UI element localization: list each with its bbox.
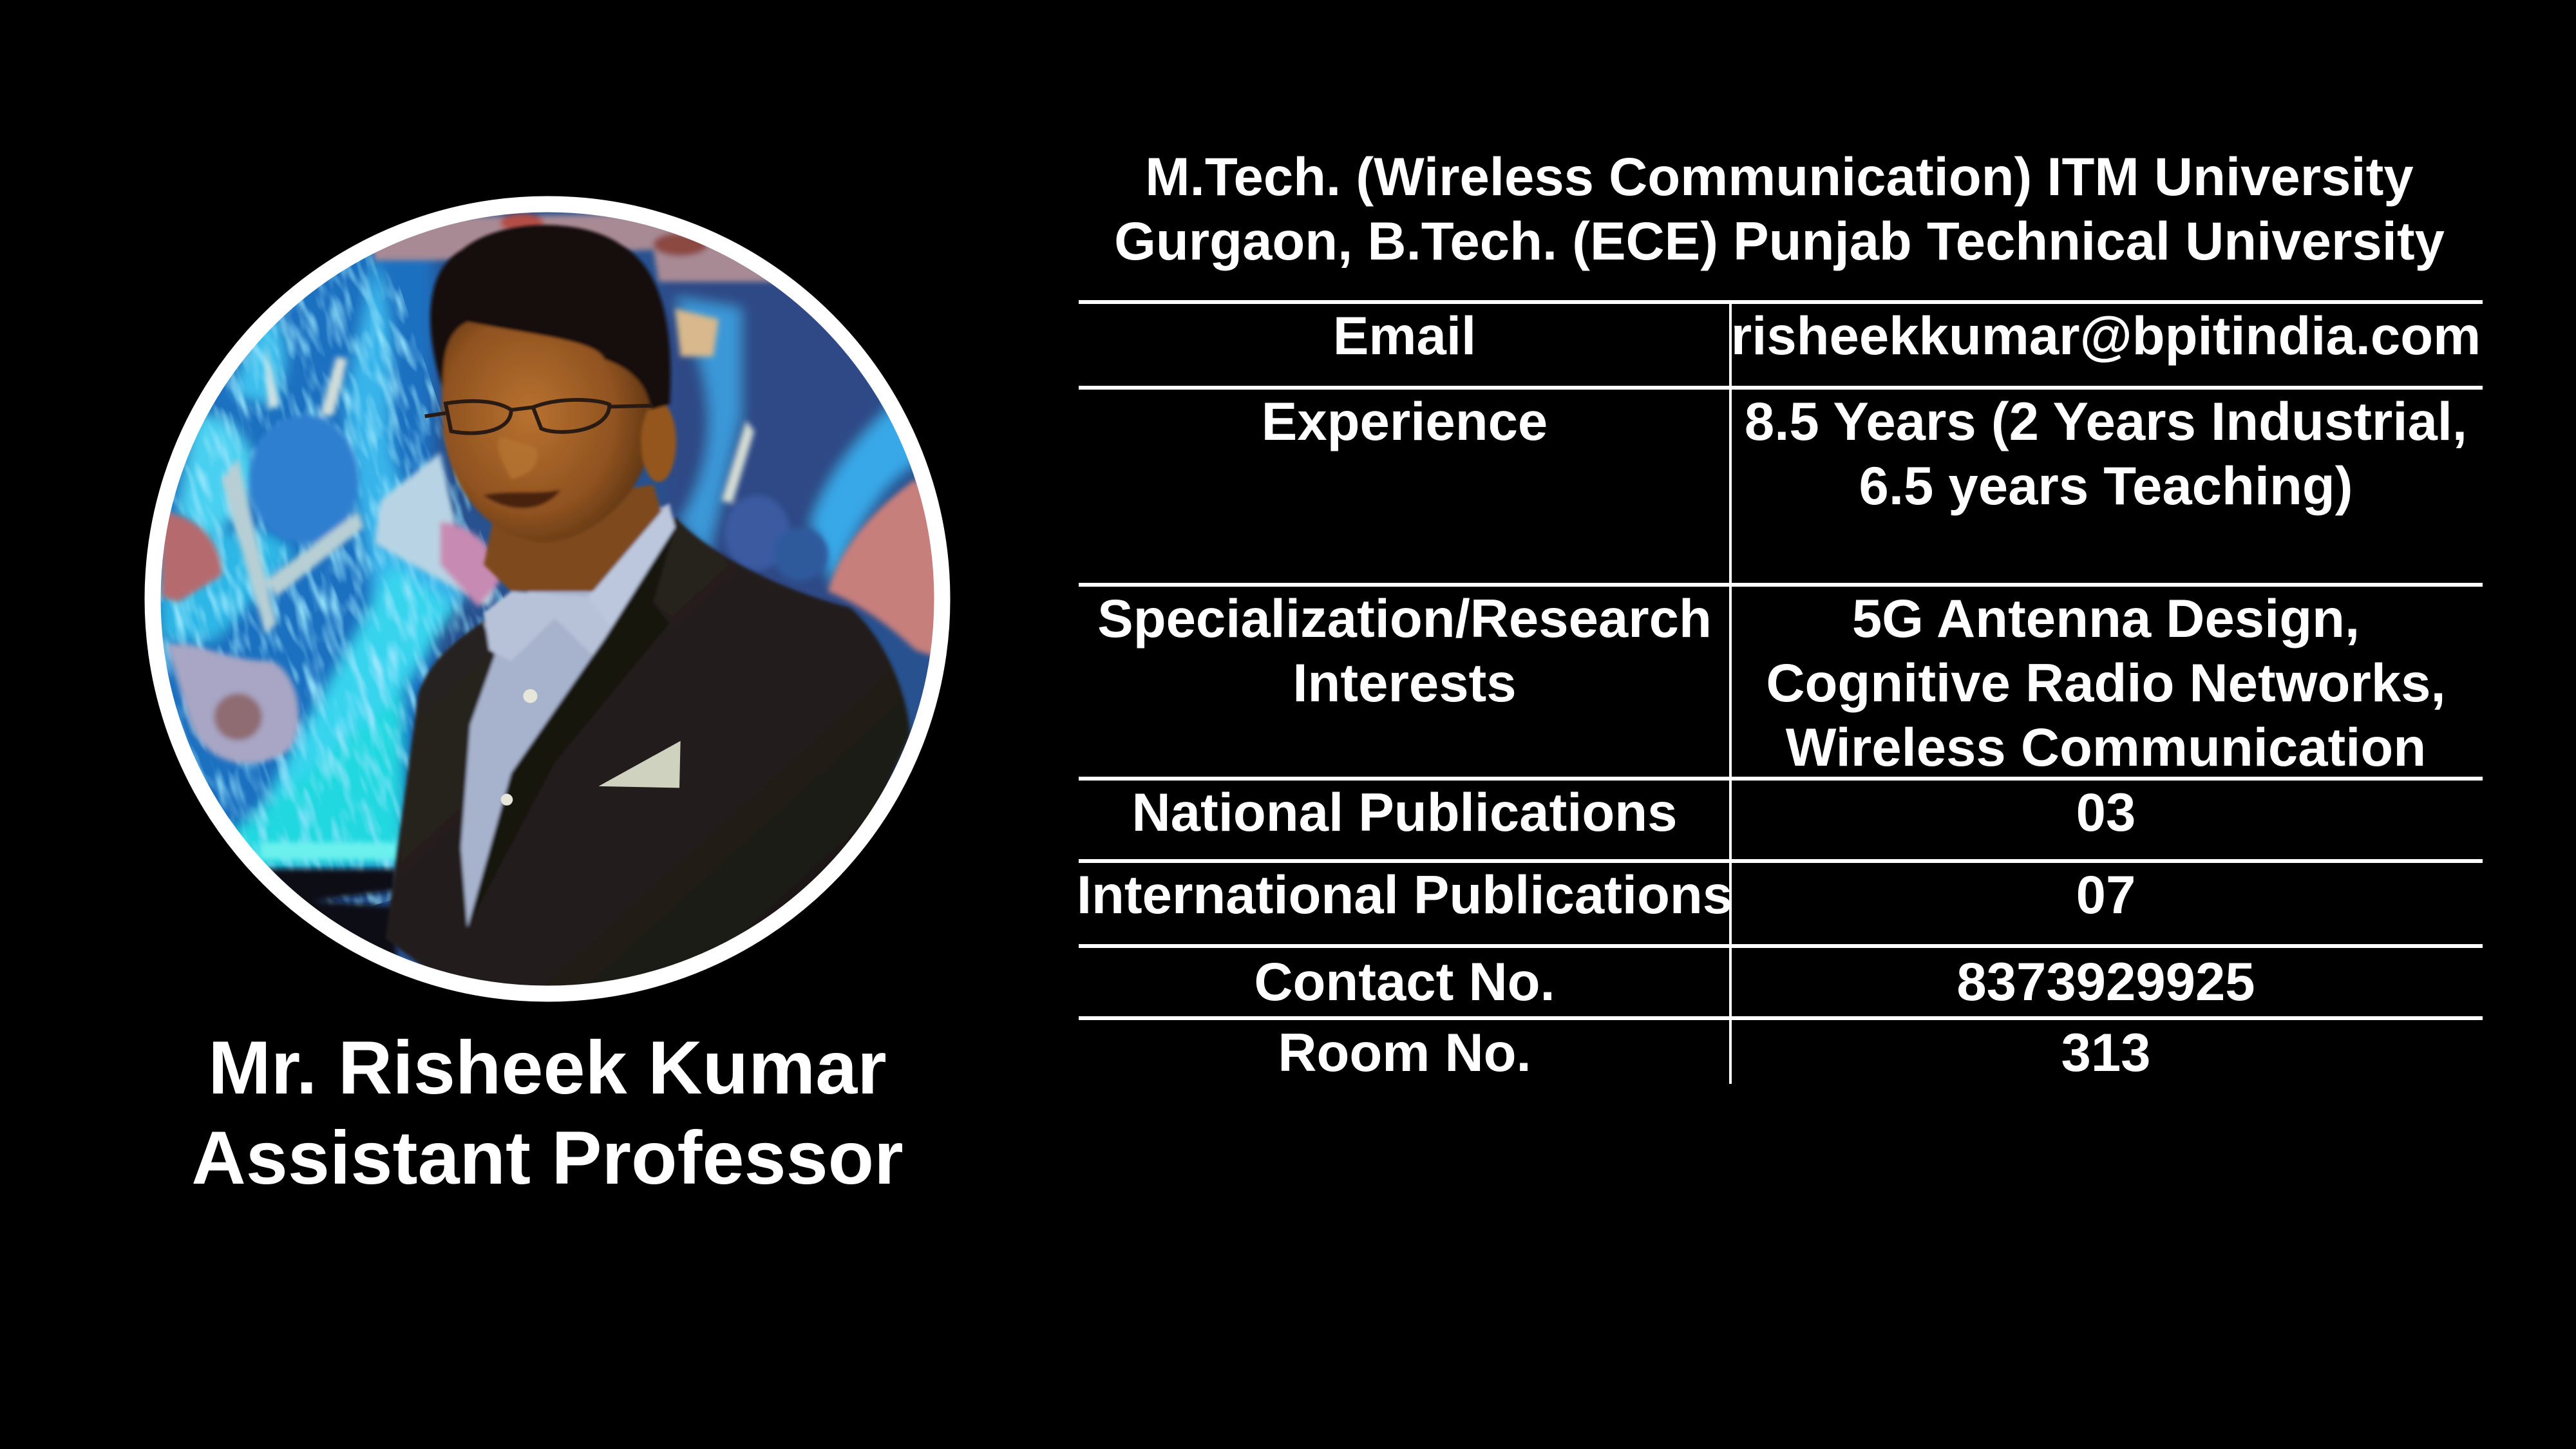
row: specialization: Specialization/Research (1097, 589, 1712, 649)
row: international publications: 07 (2076, 865, 2136, 925)
hair (430, 225, 670, 410)
lapel (468, 527, 675, 928)
row: email: risheekkumar@bpitindia.com (1731, 306, 2481, 366)
row: contact number: Contact No. (1254, 952, 1555, 1012)
row: room number (1278, 1023, 2150, 1083)
water texture (161, 254, 504, 907)
neck (484, 485, 661, 591)
row: specialization: 5G Antenna Design, (1852, 589, 2360, 649)
qualifications heading (1114, 147, 2445, 271)
row: email (1333, 306, 2481, 366)
row: contact number (1254, 952, 2255, 1012)
row: experience (1262, 392, 2467, 516)
row: international publications: International Publications (1077, 865, 1732, 925)
shirt (461, 504, 675, 928)
row: experience: 6.5 years Teaching) (1859, 456, 2353, 516)
row: experience: 8.5 Years (2 Years Industrial, (1745, 392, 2467, 451)
row: email: Email (1333, 306, 1476, 366)
qualifications heading: Gurgaon, B.Tech. (ECE) Punjab Technical University (1114, 211, 2445, 271)
portrait photo (144, 196, 951, 1002)
row: room number: 313 (2061, 1023, 2150, 1083)
row: international publications (1077, 865, 2136, 925)
row: experience: Experience (1262, 392, 1548, 451)
name and title: Assistant Professor (191, 1115, 904, 1200)
row: specialization: Wireless Communication (1786, 717, 2426, 777)
row: national publications: National Publications (1132, 782, 1677, 842)
row: specialization: Interests (1293, 653, 1517, 713)
row: room number: Room No. (1278, 1023, 1531, 1083)
shirt buttons (523, 689, 537, 703)
face (440, 296, 654, 542)
row: national publications: 03 (2076, 782, 2136, 842)
table (1077, 300, 2483, 1084)
row: contact number: 8373929925 (1956, 952, 2255, 1012)
photo ring (153, 204, 942, 994)
row: specialization (1097, 589, 2446, 777)
glasses (425, 400, 653, 433)
name and title (191, 1025, 904, 1200)
name and title: Mr. Risheek Kumar (208, 1025, 887, 1110)
qualifications heading: M.Tech. (Wireless Communication) ITM University (1145, 147, 2414, 207)
suit (386, 516, 910, 992)
pocket square (598, 741, 681, 788)
row: national publications (1132, 782, 2136, 842)
row: specialization: Cognitive Radio Networks, (1766, 653, 2446, 713)
